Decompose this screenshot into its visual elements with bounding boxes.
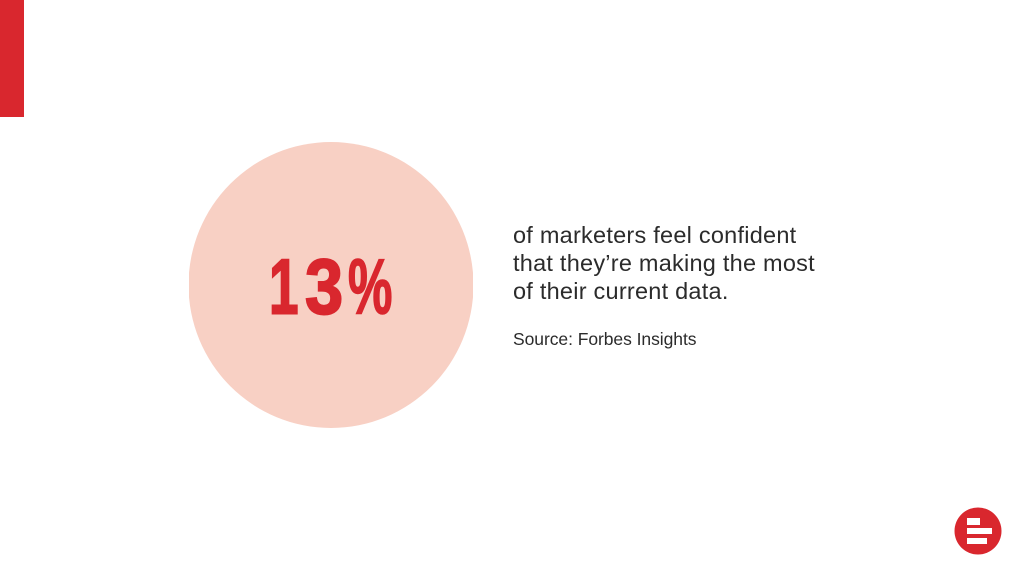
stat circle with 13%: 3 xyxy=(305,242,343,330)
description text: of their current data. xyxy=(513,278,729,304)
stat circle with 13%: % xyxy=(348,243,392,330)
stat circle with 13% xyxy=(189,142,473,428)
red corner accent bar xyxy=(0,0,24,117)
description text: of marketers feel confident xyxy=(513,222,796,248)
source line: Source: Forbes Insights xyxy=(513,329,696,349)
icon: brand logo xyxy=(954,508,1002,554)
stat circle with 13%: 1 xyxy=(269,245,298,331)
description text xyxy=(513,222,815,304)
description text: that they’re making the most xyxy=(513,250,815,276)
